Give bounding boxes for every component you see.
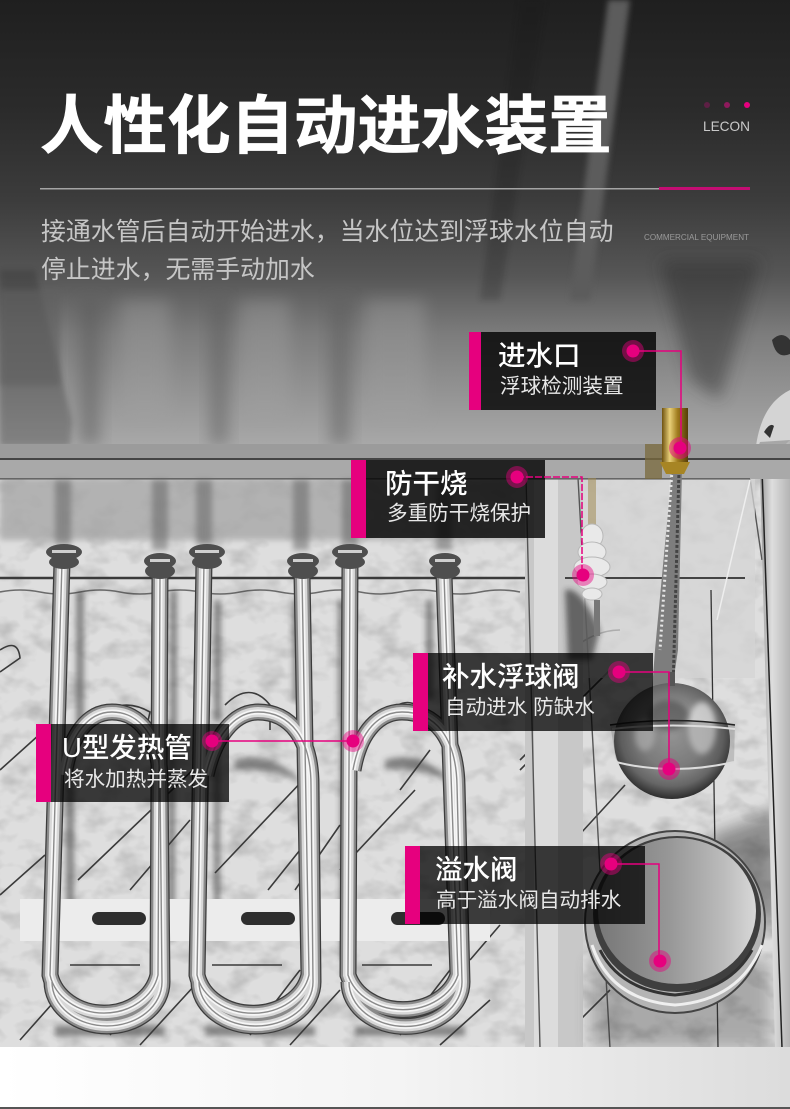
callout: U-shaped heating tube: U型发热管 bbox=[62, 732, 192, 763]
callout: float valve: 自动进水 防缺水 bbox=[445, 696, 595, 719]
callout: float valve: 补水浮球阀 bbox=[442, 661, 580, 692]
white dry-burn probe bbox=[574, 478, 610, 636]
callout: float valve bbox=[413, 653, 680, 780]
tube collars bbox=[46, 544, 461, 579]
callout: dry-burn protection bbox=[351, 460, 594, 586]
brand dots bbox=[704, 102, 750, 108]
right side wall bbox=[755, 335, 790, 1048]
reflection shadows bbox=[55, 590, 465, 1036]
blurred pipe reflections bbox=[55, 480, 452, 550]
top rail bbox=[0, 444, 790, 480]
callout: dry-burn protection: 防干烧 bbox=[385, 468, 468, 499]
callout: water inlet: 进水口 bbox=[498, 340, 580, 371]
basin cross lines bbox=[0, 578, 625, 1045]
callout: water inlet: 浮球检测装置 bbox=[500, 375, 624, 398]
description text: 接通水管后自动开始进水，当水位达到浮球水位自动 bbox=[41, 218, 614, 246]
float ball valve bbox=[610, 672, 735, 799]
callout: water inlet bbox=[469, 332, 691, 459]
callout: dry-burn protection: 多重防干烧保护 bbox=[387, 502, 531, 525]
title: 人性化自动进水装置 bbox=[40, 92, 612, 162]
mounting strip with slots bbox=[20, 899, 490, 941]
bottom white band bbox=[0, 1047, 790, 1109]
overflow valve disc bbox=[585, 831, 765, 1013]
callout: U-shaped heating tube: 将水加热并蒸发 bbox=[64, 768, 208, 791]
commercial equipment caption: COMMERCIAL EQUIPMENT bbox=[644, 232, 750, 242]
callout: overflow valve: 高于溢水阀自动排水 bbox=[436, 889, 622, 912]
callout: overflow valve: 溢水阀 bbox=[435, 854, 518, 885]
hammered basin bbox=[0, 478, 790, 1048]
heating tubes bbox=[50, 562, 462, 1026]
brand name: LECON bbox=[703, 118, 750, 134]
description text bbox=[41, 218, 614, 284]
description text: 停止进水，无需手动加水 bbox=[41, 256, 315, 284]
inlet brass fitting and hose bbox=[652, 408, 690, 690]
callout: overflow valve bbox=[405, 846, 671, 972]
callout: U-shaped heating tube bbox=[36, 724, 364, 802]
divider bbox=[40, 187, 750, 190]
right channel and tank bbox=[525, 478, 780, 1048]
